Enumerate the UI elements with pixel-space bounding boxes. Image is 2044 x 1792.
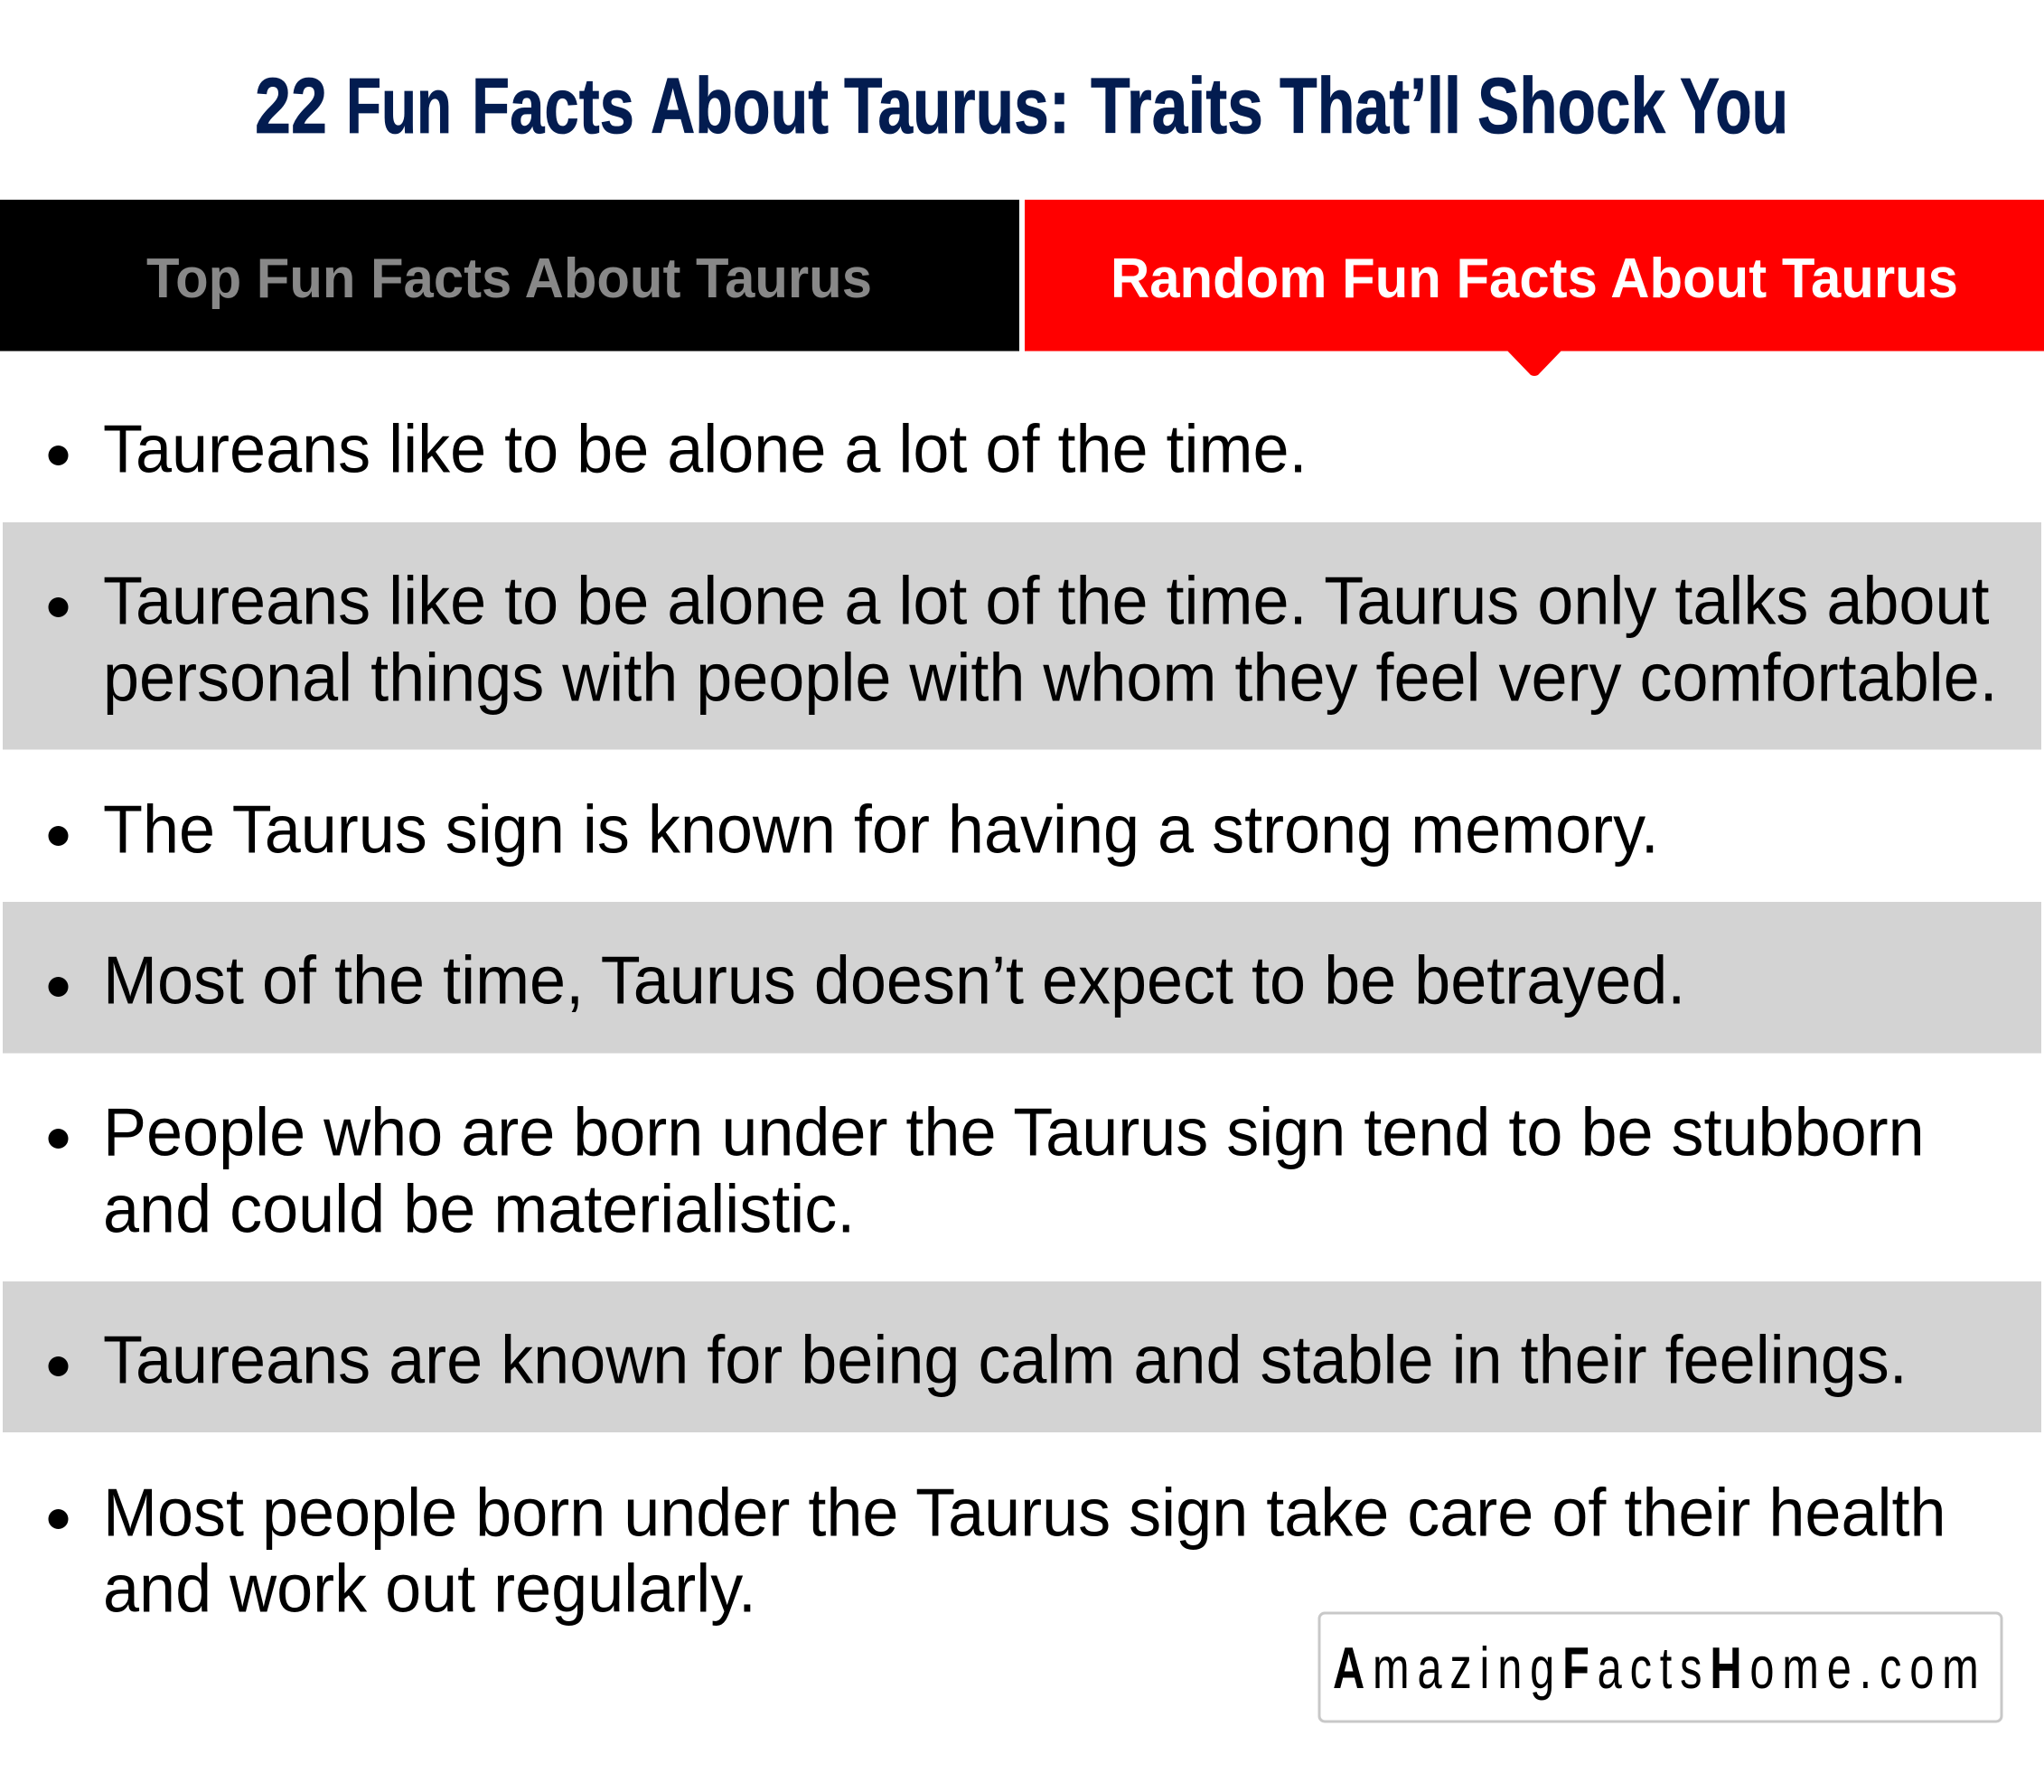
title: Facts — [472, 62, 634, 150]
tab: random fun facts — [1025, 200, 2044, 376]
row 5: People who are born under the Taurus sign tend to be stubborn — [103, 1093, 1925, 1170]
row 5: and could be materialistic. — [103, 1170, 855, 1247]
title: About — [651, 62, 829, 150]
tab: top fun facts — [0, 200, 1019, 351]
tab pointer arrow — [1507, 351, 1561, 376]
title: Shock — [1477, 62, 1665, 150]
row 6: Taureans are known for being calm and stable in their feelings. — [103, 1321, 1908, 1398]
tab label: top fun facts: Top Fun Facts About Taurus — [146, 247, 872, 310]
row 2: Taureans like to be alone a lot of the time. Taurus only talks about — [103, 562, 1990, 639]
row 6 — [3, 1281, 2041, 1432]
row 2: personal things with people with whom they feel very comfortable. — [103, 639, 1998, 716]
title: Taurus: — [844, 62, 1070, 150]
row 3: The Taurus sign is known for having a strong memory. — [103, 791, 1659, 868]
row 4 — [3, 902, 2041, 1054]
title: Fun — [346, 62, 452, 150]
title: 22 — [255, 62, 327, 150]
row 7: Most people born under the Taurus sign take care of their health — [103, 1474, 1946, 1551]
title: You — [1680, 62, 1788, 150]
tab label: random fun facts: Random Fun Facts About Taurus — [1111, 247, 1958, 310]
row 7 — [49, 1474, 1946, 1627]
title — [255, 62, 1788, 150]
title: Traits — [1091, 62, 1263, 150]
row 1: Taureans like to be alone a lot of the time. — [103, 410, 1308, 487]
row 5 — [49, 1093, 1925, 1247]
watermark text: AmazingFactsHome.com — [1333, 1636, 1979, 1702]
row 2 — [3, 522, 2041, 750]
row 7: and work out regularly. — [103, 1550, 756, 1627]
row 4: Most of the time, Taurus doesn’t expect to be betrayed. — [103, 942, 1685, 1018]
watermark logo box — [1319, 1613, 2002, 1722]
title: That’ll — [1280, 62, 1461, 150]
